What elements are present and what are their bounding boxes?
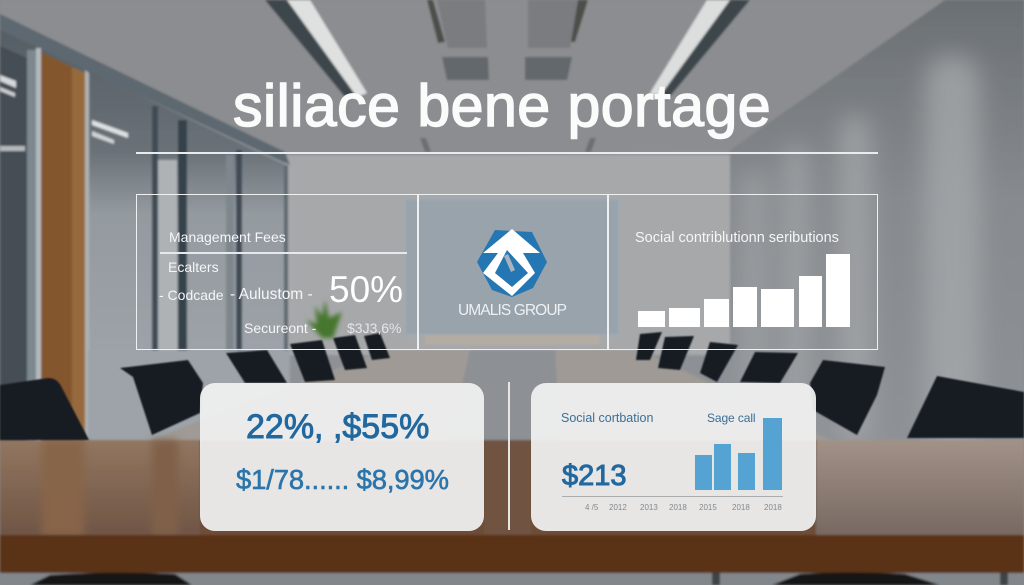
label: Codcade: - Codcade (159, 287, 224, 303)
table top (0, 440, 1024, 536)
ceiling lights (265, 0, 357, 97)
glass mullions (152, 106, 158, 406)
panel: stats card (200, 383, 484, 531)
heading: management fees: Management Fees (169, 229, 286, 245)
stat: $1/78 $8,99%: $1/78...... $8,99% (236, 464, 449, 495)
label: Sage call: Sage call (707, 411, 755, 425)
panel: chart card (531, 383, 816, 531)
panel: social contributions (635, 230, 850, 327)
panel: cell divider right (607, 195, 608, 349)
stat: $3J3,6%: $3J3,6% (347, 320, 401, 336)
axis labels: 2018 (764, 503, 782, 512)
stat: 22%, ,$55%: 22%, ,$55% (246, 408, 429, 446)
bar chart: blue (695, 418, 782, 490)
label: Social cortbation: Social cortbation (561, 411, 653, 425)
label: Secureont: Secureont - (244, 320, 316, 336)
big stat: 50%: 50% (329, 269, 403, 310)
floor and table far surface (88, 350, 290, 440)
axis labels: 4 /5 (585, 503, 598, 512)
icon: octagon logo (477, 229, 547, 297)
title: siliace bene portage (233, 73, 771, 139)
label: Ecalters: Ecalters (168, 259, 219, 275)
ceiling (0, 0, 945, 160)
plant (306, 300, 342, 338)
stat: $213: $213 (562, 460, 627, 492)
panel: management fees (159, 229, 407, 336)
chairs (0, 378, 89, 440)
panel: cell divider left (417, 195, 418, 349)
axis labels (585, 503, 782, 512)
table edge (0, 535, 1024, 573)
label: UMALIS GROUP: UMALIS GROUP (458, 302, 566, 319)
wood column (41, 52, 72, 440)
panel: logo (458, 229, 566, 319)
axis labels: 2013 (640, 503, 658, 512)
title rule (136, 152, 878, 154)
axis labels: 2018 (669, 503, 687, 512)
below table (0, 573, 1024, 585)
axis labels: 2018 (732, 503, 750, 512)
chart axis (562, 496, 783, 497)
bar chart: white (638, 254, 850, 327)
divider line (160, 252, 407, 254)
whiteboard (404, 198, 620, 336)
heading: social contributions: Social contriblutionn seributions (635, 230, 839, 246)
right wall (730, 0, 1024, 440)
label: Aulustom: - Aulustom - (230, 286, 313, 303)
axis labels: 2015 (699, 503, 717, 512)
ceiling vents (427, 0, 445, 43)
vertical divider between cards (508, 382, 510, 530)
left glass wall (0, 28, 285, 440)
axis labels: 2012 (609, 503, 627, 512)
panel: three-cell outlined frame (136, 194, 878, 350)
back wall (285, 155, 735, 355)
